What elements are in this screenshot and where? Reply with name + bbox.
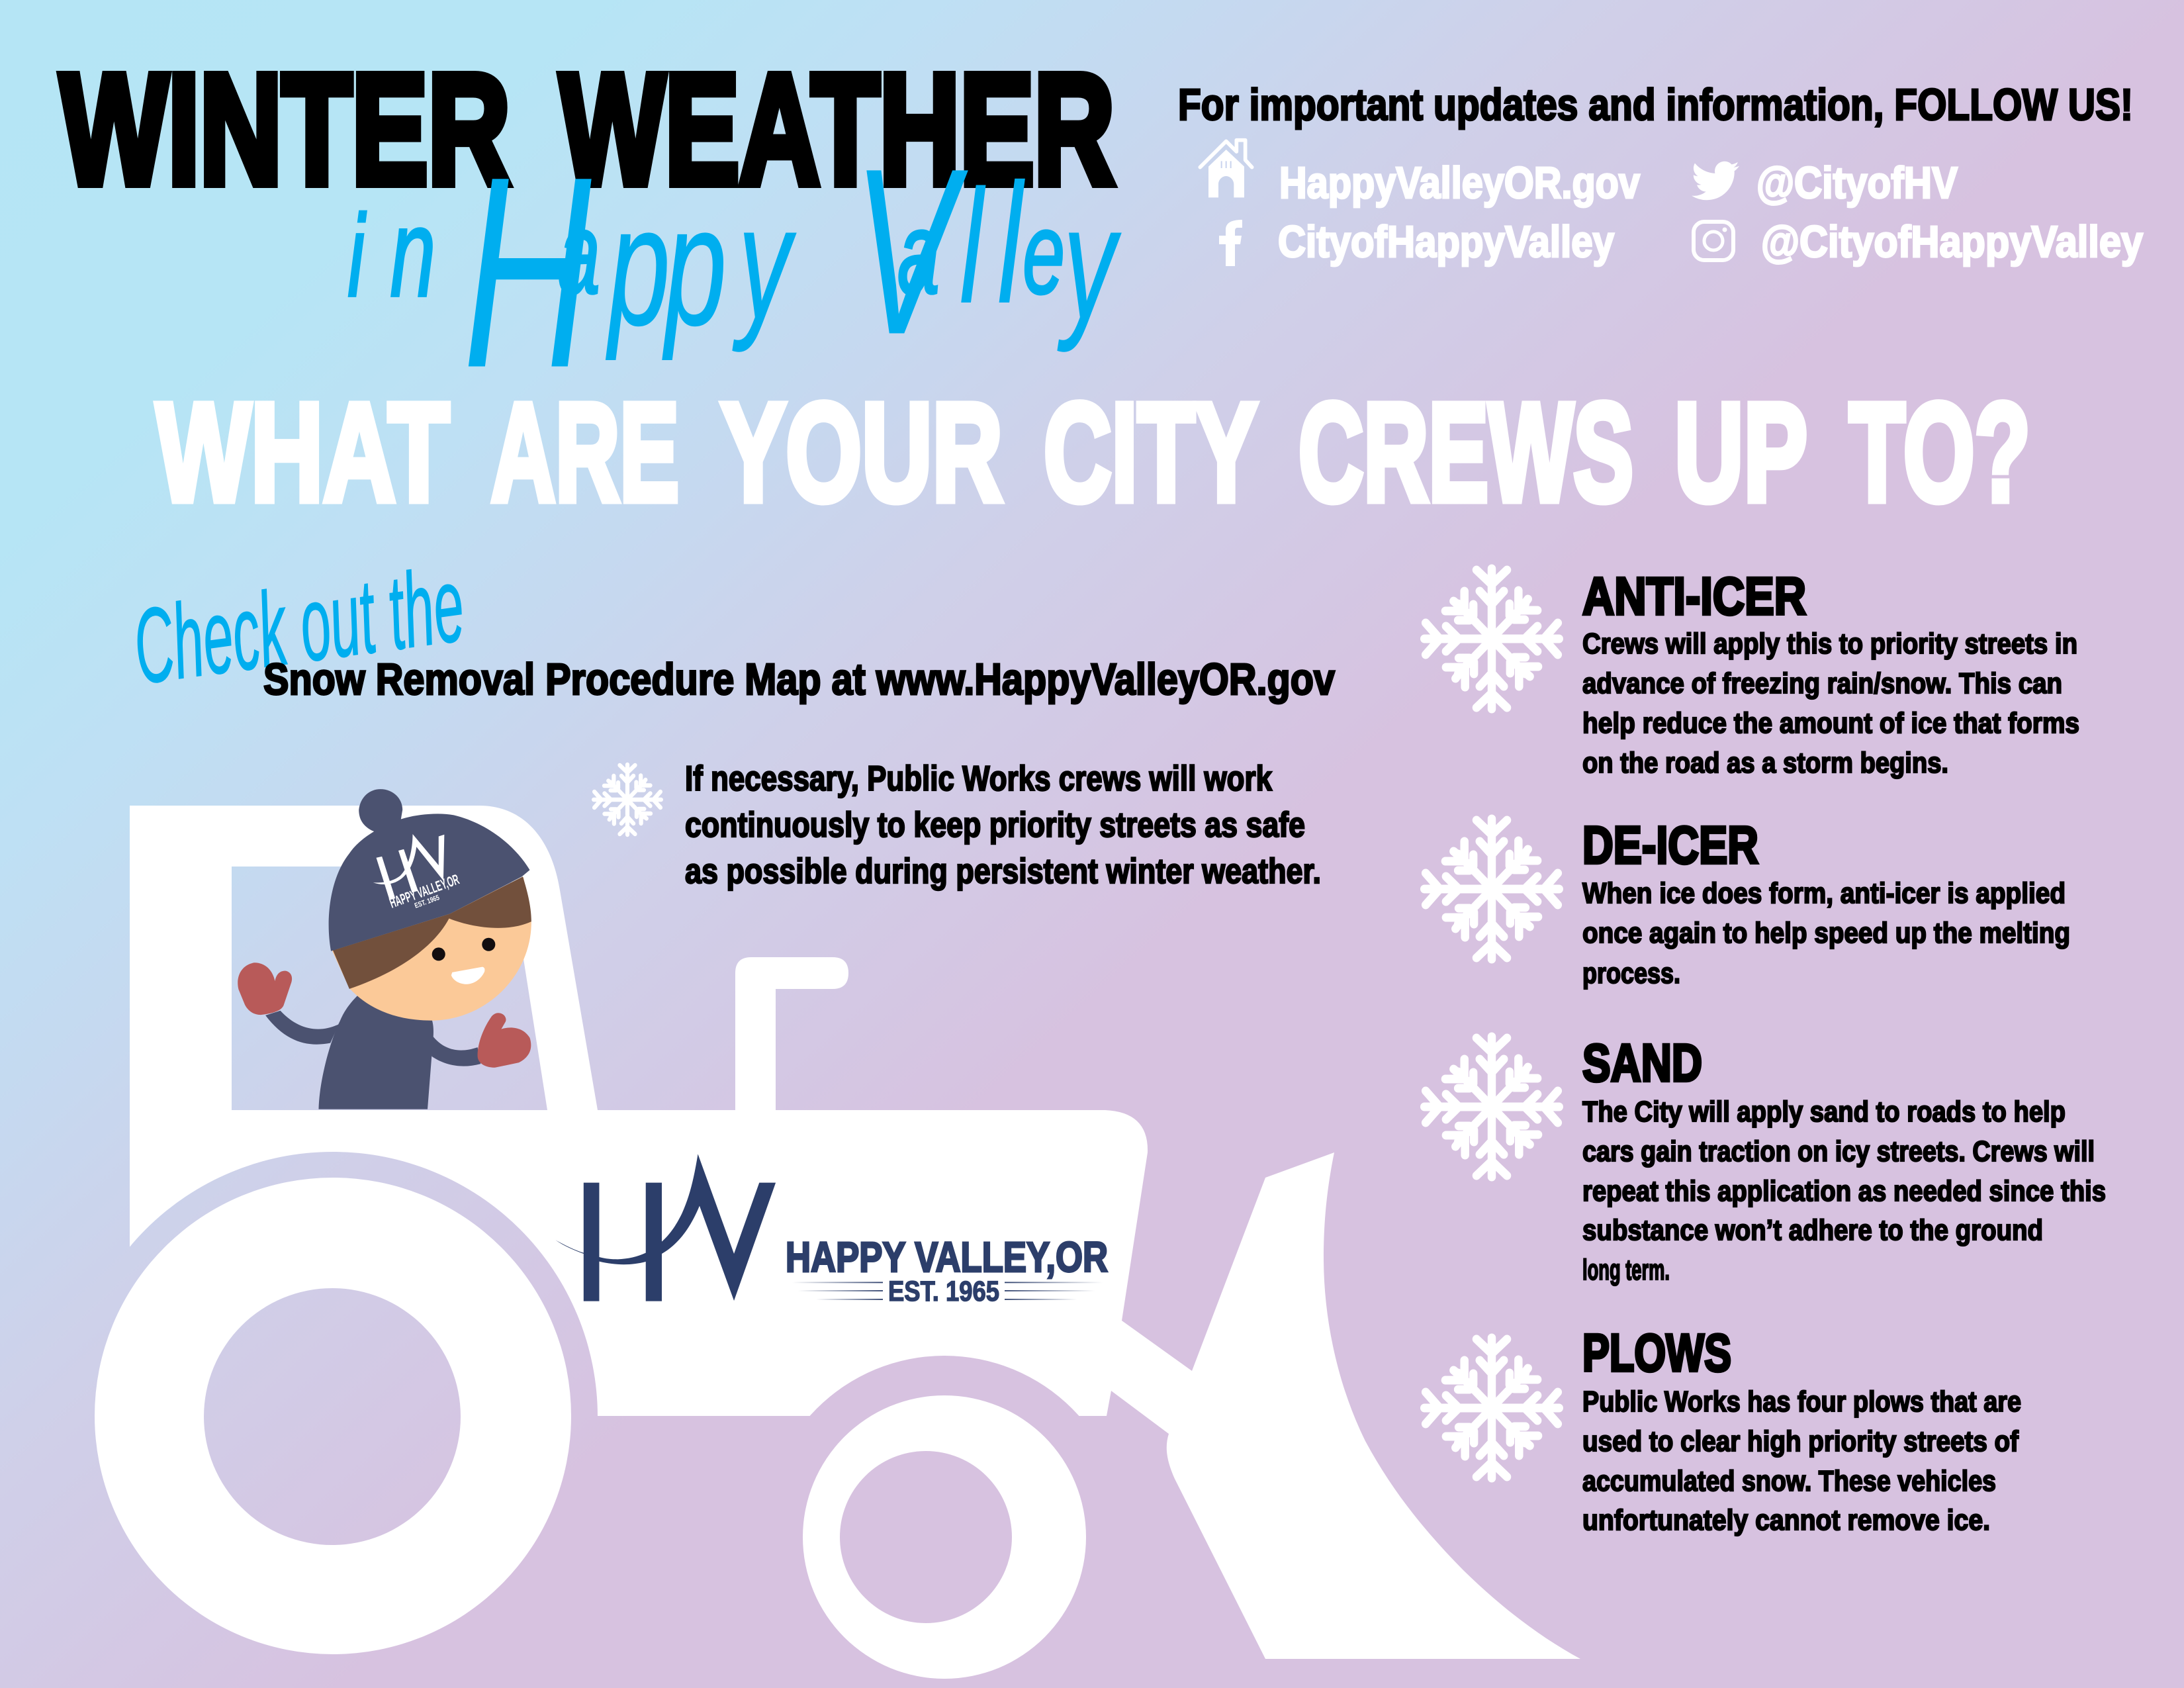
front wheel hub bbox=[840, 1451, 1012, 1623]
description: de-icer: once again to help speed up the melting bbox=[1582, 917, 2070, 949]
icon: twitter bird bbox=[1692, 162, 1739, 200]
description: plows: used to clear high priority streets of bbox=[1582, 1425, 2019, 1458]
right eye bbox=[482, 938, 495, 951]
icon: instagram bbox=[1694, 222, 1733, 260]
front wheel bbox=[803, 1395, 1086, 1679]
script subtitle: in Happy Valley: p bbox=[606, 171, 670, 361]
script subtitle: in Happy Valley: y bbox=[733, 173, 820, 353]
heading: de-icer: DE-ICER bbox=[1582, 816, 1758, 874]
social links block bbox=[1200, 140, 2143, 267]
heading: sand: SAND bbox=[1582, 1033, 1702, 1092]
logo HV mark bbox=[555, 1154, 776, 1301]
main headline: YOUR bbox=[721, 374, 1003, 530]
description: sand: substance won’t adhere to the ground bbox=[1582, 1214, 2043, 1246]
right mitten bbox=[478, 1013, 531, 1068]
description: sand: repeat this application as needed since this bbox=[1582, 1175, 2106, 1207]
panel: plows bbox=[1424, 1323, 2021, 1536]
description: de-icer bbox=[1582, 877, 2070, 990]
instagram handle: @CityofHappyValley bbox=[1761, 217, 2143, 267]
main headline: UP bbox=[1674, 374, 1807, 530]
main headline: WHAT bbox=[156, 374, 449, 530]
script subtitle: in Happy Valley: i bbox=[347, 191, 367, 321]
website link: HappyValleyOR.gov bbox=[1279, 158, 1640, 208]
description: plows: Public Works has four plows that are bbox=[1582, 1385, 2021, 1418]
face bbox=[332, 877, 531, 1021]
description: anti-icer: advance of freezing rain/snow. This can bbox=[1582, 667, 2062, 700]
title: winter weather: WINTER bbox=[60, 42, 510, 217]
character: driver waving bbox=[238, 789, 531, 1109]
heading: anti-icer: ANTI-ICER bbox=[1582, 567, 1806, 626]
tractor illustration bbox=[68, 806, 1580, 1688]
description: sand: long term. bbox=[1582, 1254, 1670, 1286]
left arm bbox=[265, 1011, 339, 1045]
icon: small snowflake bbox=[594, 765, 661, 835]
hat logo mark bbox=[373, 834, 444, 900]
script callout: check out the: Check out the bbox=[127, 544, 471, 706]
description: anti-icer: on the road as a storm begins. bbox=[1582, 747, 1948, 779]
panel: anti-icer bbox=[1424, 567, 2079, 779]
description: plows: accumulated snow. These vehicles bbox=[1582, 1465, 1996, 1497]
right arm bbox=[432, 1035, 480, 1066]
icon: snowflake bbox=[1424, 1338, 1559, 1478]
public works paragraph: continuously to keep priority streets as safe bbox=[685, 806, 1305, 845]
logo name: HAPPY VALLEY,OR bbox=[786, 1233, 1108, 1281]
hair bbox=[333, 876, 531, 989]
front fender gap bbox=[764, 1356, 1125, 1688]
script subtitle: in Happy Valley: H bbox=[463, 119, 594, 424]
left mitten bbox=[238, 962, 292, 1015]
smile bbox=[451, 967, 484, 984]
description: plows bbox=[1582, 1385, 2021, 1536]
script subtitle: in Happy Valley: V bbox=[853, 119, 969, 383]
script subtitle: in Happy Valley: p bbox=[662, 171, 727, 361]
script subtitle: in Happy Valley: a bbox=[558, 189, 600, 318]
public works paragraph: If necessary, Public Works crews will work bbox=[685, 759, 1272, 798]
exhaust pipe bbox=[735, 957, 848, 1110]
snow removal map line: Snow Removal Procedure Map at www.HappyValleyOR.gov bbox=[263, 655, 1335, 704]
description: anti-icer: help reduce the amount of ice that forms bbox=[1582, 707, 2079, 739]
torso bbox=[318, 993, 433, 1109]
description: sand: cars gain traction on icy streets. Crews will bbox=[1582, 1135, 2095, 1168]
description: sand: The City will apply sand to roads to help bbox=[1582, 1096, 2066, 1128]
script subtitle: in Happy Valley: e bbox=[1023, 189, 1065, 318]
rear wheel hub bbox=[204, 1288, 461, 1545]
panel: sand bbox=[1424, 1033, 2106, 1286]
hat logo year: EST. 1965 bbox=[414, 894, 441, 910]
facebook name: CityofHappyValley bbox=[1278, 217, 1614, 267]
rear fender gap bbox=[68, 1152, 598, 1681]
main headline: CREWS bbox=[1298, 374, 1633, 530]
description: de-icer: When ice does form, anti-icer is applied bbox=[1582, 877, 2066, 910]
cab window bbox=[232, 867, 547, 1110]
happy valley logo bbox=[555, 1154, 1108, 1307]
public works paragraph bbox=[685, 759, 1321, 891]
icon: house bbox=[1200, 140, 1252, 197]
description: anti-icer bbox=[1582, 628, 2079, 779]
description: de-icer: process. bbox=[1582, 957, 1680, 990]
title: winter weather: WEATHER bbox=[560, 42, 1115, 217]
main headline: TO? bbox=[1849, 374, 2030, 530]
main headline: ARE bbox=[491, 374, 679, 530]
left eye bbox=[432, 947, 445, 961]
rear wheel bbox=[95, 1178, 571, 1654]
main headline: CITY bbox=[1044, 374, 1257, 530]
icon: snowflake bbox=[1424, 569, 1559, 709]
script subtitle: in Happy Valley: y bbox=[1058, 173, 1121, 353]
icon: snowflake bbox=[1424, 1037, 1559, 1177]
script subtitle: in Happy Valley: l bbox=[960, 157, 986, 336]
script subtitle: in Happy Valley: a bbox=[897, 189, 940, 318]
description: sand bbox=[1582, 1096, 2106, 1286]
hat logo text: HAPPY VALLEY,OR bbox=[387, 871, 461, 912]
icon: facebook f bbox=[1219, 220, 1242, 266]
main headline bbox=[156, 374, 2030, 530]
heading: plows: PLOWS bbox=[1582, 1323, 1731, 1382]
icon: snowflake bbox=[1424, 819, 1559, 959]
description: plows: unfortunately cannot remove ice. bbox=[1582, 1504, 1990, 1536]
panel: de-icer bbox=[1424, 816, 2070, 990]
beanie hat bbox=[329, 789, 529, 951]
logo year: EST. 1965 bbox=[888, 1276, 999, 1307]
title: winter weather bbox=[60, 42, 1115, 217]
script subtitle: in Happy Valley: n bbox=[390, 183, 458, 322]
description: anti-icer: Crews will apply this to priority streets in bbox=[1582, 628, 2077, 660]
script subtitle: in Happy Valley: l bbox=[997, 148, 1024, 338]
tractor body, cab and plow blade bbox=[130, 806, 1580, 1659]
twitter handle: @CityofHV bbox=[1756, 158, 1958, 208]
public works paragraph: as possible during persistent winter weather. bbox=[685, 852, 1321, 891]
